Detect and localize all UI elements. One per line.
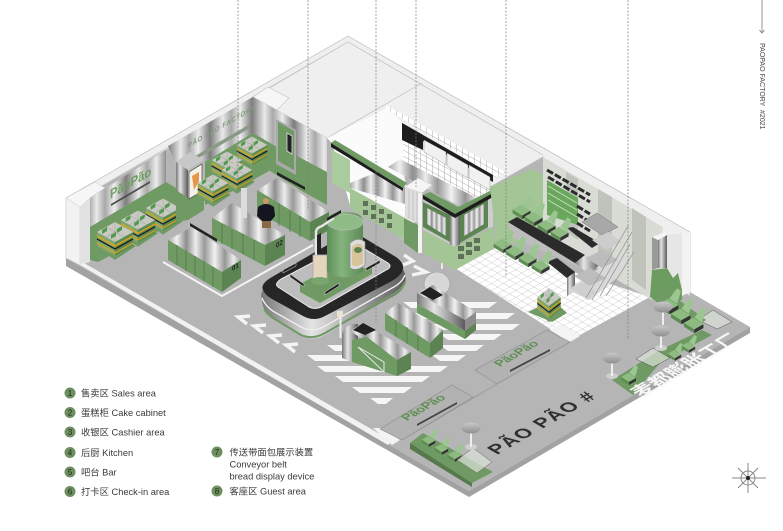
concrete slab — [66, 36, 750, 497]
black sign box — [402, 123, 423, 150]
pallets on wall A — [94, 198, 183, 260]
vertical caption: PAOPAO FACTORY #2021 — [758, 43, 765, 130]
kitchen back — [385, 106, 505, 212]
legend item 6: 6 — [68, 488, 73, 496]
black sign — [190, 223, 217, 242]
counter 3 — [417, 272, 476, 339]
bar front — [423, 190, 497, 270]
wall B: stainless with factory slogan: PÃO PÃO FACTORY — [188, 102, 255, 150]
legend item 1: 1 — [68, 389, 73, 398]
column — [241, 188, 247, 218]
inner platform — [277, 244, 390, 308]
pipes and signs — [283, 210, 380, 295]
right wall with dotted panels — [543, 157, 663, 300]
wall C: stainless with door — [253, 97, 327, 205]
floor rug lines — [380, 330, 570, 440]
legend item 1: 售卖区 Sales area — [81, 388, 157, 398]
guest area green panel — [490, 169, 543, 247]
island 2 cabinet — [212, 188, 285, 266]
left corner wall block — [66, 182, 105, 265]
chairs upper row — [513, 195, 571, 241]
counter 2 — [385, 303, 443, 358]
lamp post — [439, 243, 445, 269]
legend item 4: 后厨 Kitchen — [81, 448, 133, 458]
legend item 5: 吧台 Bar — [81, 466, 117, 478]
legend item 7 — [212, 446, 314, 482]
tiled floor — [455, 247, 650, 342]
glass table — [457, 448, 492, 473]
black belt — [262, 234, 403, 319]
legend item 7: Conveyor belt — [230, 460, 287, 470]
right chairs — [652, 288, 706, 333]
legend item 4: 4 — [68, 448, 73, 458]
label 02: 02 — [276, 239, 283, 250]
PaoPao floor logo rug 2: PãoPão — [490, 338, 543, 369]
menu boards — [424, 140, 490, 190]
legend item 7: 7 — [215, 448, 220, 457]
zone separator — [402, 342, 570, 440]
lamp post — [337, 311, 343, 338]
round tables — [462, 302, 672, 450]
stairs — [568, 213, 634, 300]
floor brand text chinese: 麦都膨胀工厂 — [625, 331, 747, 401]
small display cylinder — [311, 255, 329, 285]
tank window — [350, 239, 365, 269]
ceiling lattice — [385, 106, 505, 178]
floor brand text PAO PAO: PÃO PÃO # — [482, 388, 603, 458]
bar beam left — [331, 140, 407, 191]
bench lower left — [410, 429, 493, 487]
person — [257, 198, 275, 228]
legend item 8: 客座区 Guest area — [230, 486, 307, 496]
white floor patches — [373, 324, 580, 445]
glass table — [698, 310, 732, 329]
legend item 3: 3 — [68, 428, 73, 437]
conveyor belt display device — [261, 210, 406, 338]
floor chevrons — [238, 255, 426, 352]
legend — [64, 388, 314, 497]
black sign — [277, 172, 305, 190]
right corner pillars — [650, 232, 690, 305]
guest seating tiers — [494, 195, 600, 296]
legend item 4 — [64, 447, 133, 458]
PaoPao floor logo rug 2 — [475, 330, 570, 384]
label 01: 01 — [232, 262, 239, 273]
legend item 3: 收银区 Cashier area — [81, 426, 166, 438]
green base front — [423, 230, 455, 270]
white floor edge strip — [80, 263, 392, 445]
wall B: stainless with factory slogan — [168, 97, 278, 205]
wall A: stainless with PaoPao logo: PãoPão — [110, 163, 151, 202]
roof and wall tops — [66, 36, 690, 296]
wall A: stainless with PaoPao logo — [90, 150, 176, 262]
black sign rail — [402, 123, 493, 182]
arrow: top right — [760, 0, 764, 33]
chairs lower row — [494, 229, 552, 274]
floor guide line — [163, 245, 313, 296]
white column — [405, 178, 432, 253]
silver base — [261, 239, 406, 338]
legend item 5: 5 — [68, 468, 73, 477]
pale curtain — [332, 150, 350, 193]
counter 1 — [342, 323, 411, 376]
pallets on wall B — [195, 136, 270, 207]
PaoPao floor logo rug 1: PãoPão — [397, 392, 450, 423]
kitchen front white zone — [327, 108, 420, 250]
window left — [423, 202, 450, 242]
legend item 7: 传送带面包展示装置 — [230, 446, 313, 458]
bench right — [612, 310, 732, 395]
legend item 8: 8 — [215, 487, 220, 496]
legend item 6: 打卡区 Check-in area — [81, 486, 170, 497]
floor plan: isometric store — [66, 36, 750, 497]
door — [276, 119, 296, 175]
legend item 5 — [64, 466, 117, 478]
green planting wall — [547, 170, 590, 231]
beam right — [423, 190, 493, 217]
island 3 cabinet — [257, 172, 329, 241]
leader lines — [238, 0, 628, 340]
green base — [300, 268, 372, 303]
poster cabinet — [176, 152, 204, 222]
legend item 2: 2 — [68, 408, 73, 418]
compass icon — [732, 463, 766, 493]
legend item 2: 蛋糕柜 Cake cabinet — [81, 407, 166, 418]
main tank — [327, 212, 365, 278]
small pallet on tiles — [528, 288, 567, 322]
silver back counter — [388, 159, 487, 212]
island 1 cabinet — [168, 223, 241, 292]
zebra crossing — [307, 302, 520, 404]
grid wall — [403, 140, 490, 212]
legend item 7: bread display device — [230, 472, 314, 482]
window right — [460, 197, 488, 243]
glass table — [636, 348, 670, 367]
PaoPao floor logo rug 1 — [380, 385, 473, 440]
bar left counter — [350, 173, 418, 253]
